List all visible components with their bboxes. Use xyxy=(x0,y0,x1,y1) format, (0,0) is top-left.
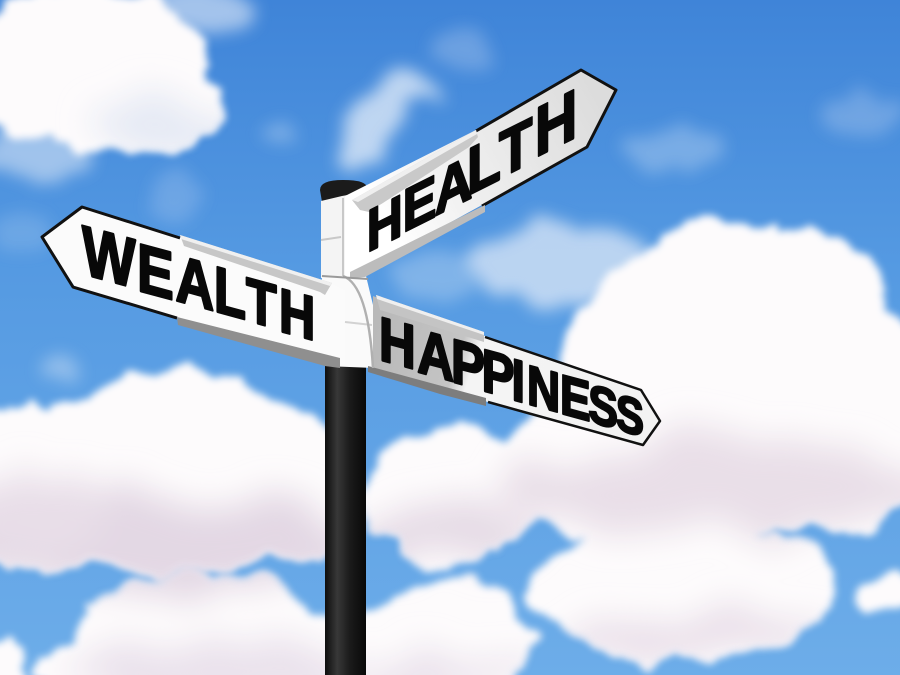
happiness label: I xyxy=(512,345,525,416)
happiness label: P xyxy=(451,326,485,405)
wealth sign board xyxy=(42,207,345,364)
happiness sign board xyxy=(373,296,660,445)
health bottom rail xyxy=(350,205,485,278)
happiness label: H xyxy=(379,305,416,383)
post: black cap xyxy=(320,180,367,202)
post: white lower collar xyxy=(320,276,374,368)
wealth label: T xyxy=(246,265,277,343)
happiness label: A xyxy=(417,317,454,396)
happiness label: S xyxy=(616,384,644,449)
happiness top rail xyxy=(376,295,484,342)
health label: T xyxy=(499,104,532,193)
health label: H xyxy=(535,75,577,173)
health sign board xyxy=(345,70,616,278)
wealth label: E xyxy=(137,230,174,315)
thin high clouds xyxy=(0,0,900,382)
happiness label: E xyxy=(560,363,591,434)
wealth bottom rail xyxy=(177,317,340,368)
happiness label: S xyxy=(588,373,618,441)
post: collar seam details xyxy=(321,198,373,368)
happiness bottom rail xyxy=(368,366,486,406)
wealth label: W xyxy=(82,211,136,303)
wealth label: L xyxy=(214,252,246,334)
sign: wealth xyxy=(42,207,345,368)
wealth top rail xyxy=(180,235,332,295)
health label: L xyxy=(467,119,501,210)
signpost xyxy=(42,70,660,675)
post: white upper collar xyxy=(321,192,366,280)
happiness label: N xyxy=(527,354,560,426)
health label: E xyxy=(403,162,436,246)
health label: H xyxy=(367,182,403,266)
sign: health xyxy=(345,70,616,278)
wealth label: H xyxy=(279,276,315,355)
post: black pole xyxy=(325,360,366,675)
sign: happiness xyxy=(368,295,660,449)
happiness label: P xyxy=(482,336,514,412)
wealth label: A xyxy=(176,241,214,325)
health top rail xyxy=(352,130,478,212)
health label: A xyxy=(435,141,472,229)
